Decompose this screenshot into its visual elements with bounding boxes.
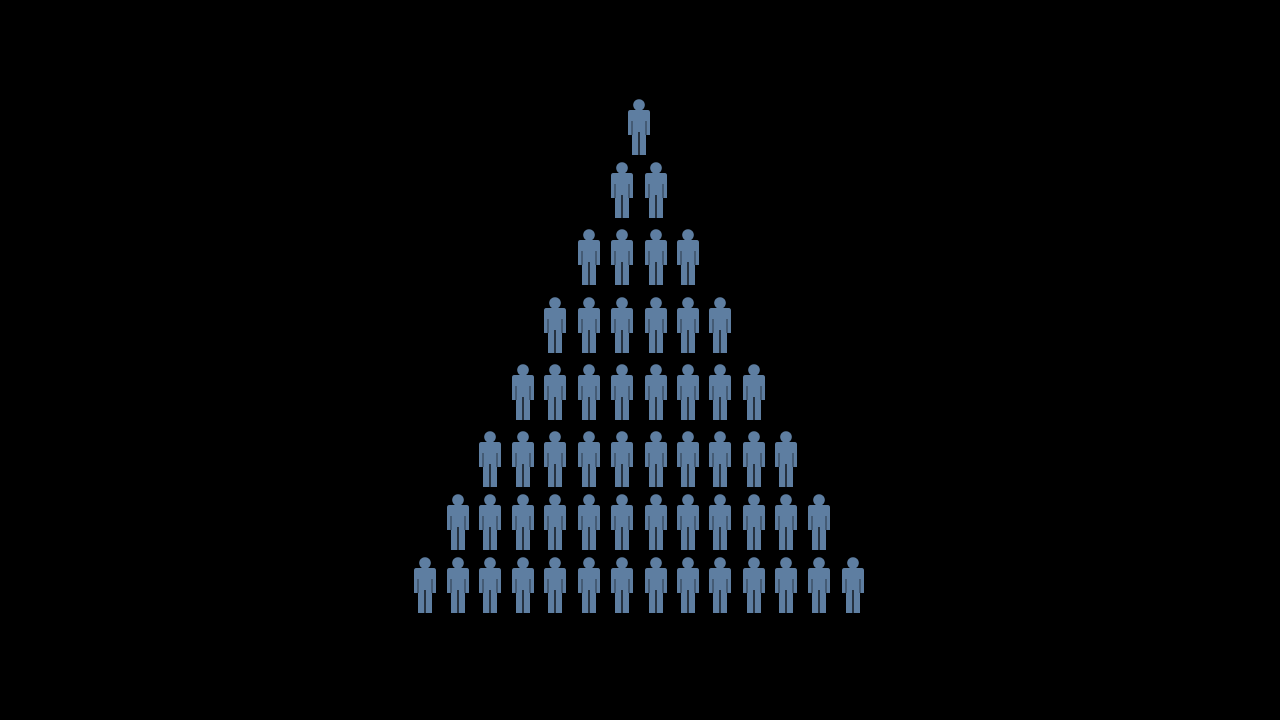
row 1: 1 person bbox=[628, 99, 650, 155]
row 6: 10 people bbox=[479, 431, 797, 487]
row 8: 14 people bbox=[414, 557, 864, 613]
row 4: 6 people bbox=[544, 297, 731, 353]
row 7: 12 people bbox=[447, 494, 830, 550]
row 5: 8 people bbox=[512, 364, 765, 420]
row 2: 2 people bbox=[611, 162, 667, 218]
row 3: 4 people bbox=[578, 229, 699, 285]
